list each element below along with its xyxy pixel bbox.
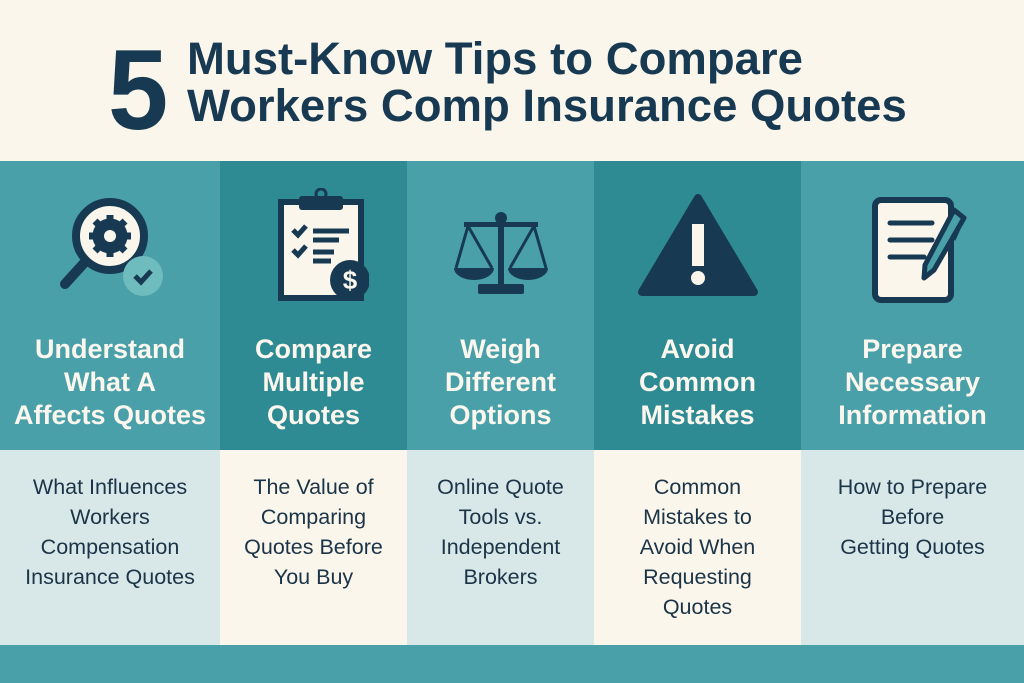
- text block: weigh: Tools vs.: [459, 505, 542, 529]
- title: [108, 27, 907, 154]
- heading: Prepare: [862, 334, 963, 364]
- text block: compare: Quotes Before: [244, 535, 383, 559]
- heading: [639, 334, 756, 430]
- text block: understand: Compensation: [41, 535, 179, 559]
- heading: What A: [64, 367, 156, 397]
- text block: avoid: Quotes: [663, 595, 732, 619]
- text block: understand: [0, 450, 220, 645]
- text block: prepare: Getting Quotes: [840, 535, 985, 559]
- text block: compare: [220, 450, 407, 645]
- heading: Compare: [255, 334, 372, 364]
- footer bar: [0, 645, 1024, 683]
- heading: [838, 334, 987, 430]
- icon: clipboard: [278, 188, 369, 301]
- heading: Weigh: [460, 334, 541, 364]
- heading: Information: [838, 400, 987, 430]
- heading: Mistakes: [640, 400, 755, 430]
- panel: understand: [0, 161, 220, 450]
- text block: avoid: [594, 450, 801, 645]
- text block: weigh: Brokers: [463, 565, 538, 589]
- text block: prepare: How to Prepare: [838, 475, 987, 499]
- text block: prepare: [801, 450, 1024, 645]
- title text: Workers Comp Insurance Quotes: [187, 80, 907, 131]
- text block: avoid: Common: [654, 475, 741, 499]
- heading: Options: [450, 400, 552, 430]
- text block: compare: Comparing: [261, 505, 366, 529]
- heading: [14, 334, 206, 430]
- text block: understand: Insurance Quotes: [25, 565, 195, 589]
- panel: weigh: [407, 161, 594, 450]
- text block: compare: You Buy: [274, 565, 353, 589]
- heading: Avoid: [660, 334, 734, 364]
- heading: [255, 334, 372, 430]
- icon: magnifier gear: [60, 198, 163, 296]
- text block: prepare: Before: [881, 505, 944, 529]
- big number 5: 5: [108, 27, 168, 154]
- heading: Different: [445, 367, 556, 397]
- heading: Understand: [35, 334, 185, 364]
- icon: scales: [454, 212, 548, 294]
- panel: avoid: [594, 161, 801, 450]
- title text: Must-Know Tips to Compare: [187, 33, 803, 84]
- text block: avoid: Requesting: [643, 565, 752, 589]
- heading: Necessary: [845, 367, 980, 397]
- icon: warning: [638, 194, 758, 296]
- text block: compare: The Value of: [253, 475, 374, 499]
- text block: weigh: Online Quote: [437, 475, 564, 499]
- heading: Common: [639, 367, 756, 397]
- text block: weigh: [407, 450, 594, 645]
- icon: clipboard: $: [342, 265, 357, 295]
- panel: prepare: [801, 161, 1024, 450]
- text block: avoid: Avoid When: [640, 535, 755, 559]
- heading: Affects Quotes: [14, 400, 206, 430]
- heading: [445, 334, 556, 430]
- text block: weigh: Independent: [441, 535, 560, 559]
- heading: Multiple: [262, 367, 364, 397]
- panel: compare: [220, 161, 407, 450]
- text block: understand: Workers: [70, 505, 150, 529]
- heading: Quotes: [267, 400, 360, 430]
- text block: avoid: Mistakes to: [643, 505, 752, 529]
- icon: document pen: [872, 197, 967, 303]
- text block: understand: What Influences: [33, 475, 187, 499]
- title text: [187, 33, 907, 131]
